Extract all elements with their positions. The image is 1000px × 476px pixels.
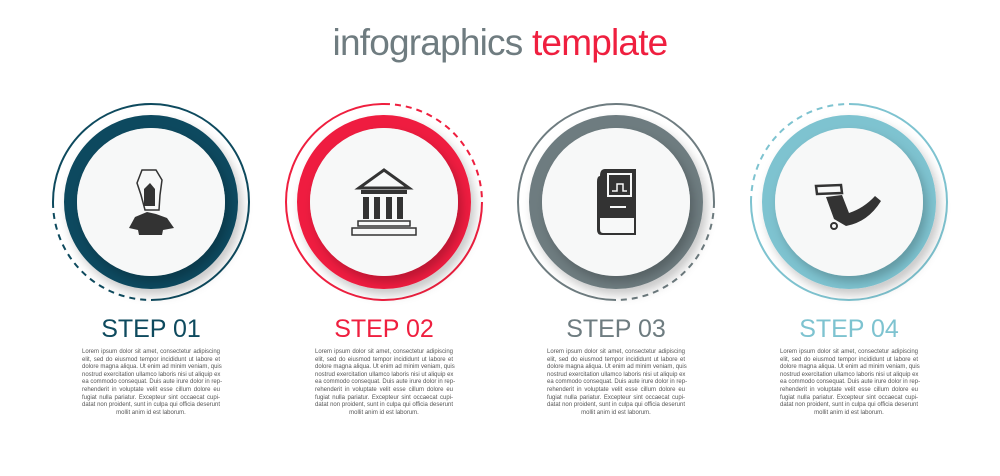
step 03 text: mollit anim id est laborum.	[581, 410, 651, 416]
step 04 text: nostrud exercitation ullamco laboris nisi ut aliquip ex	[780, 372, 918, 378]
step 02 text: STEP 02	[334, 315, 434, 343]
step 04 text: datat non proident, sunt in culpa qui officia deserunt	[780, 402, 918, 408]
step 01 text: STEP 01	[101, 315, 201, 343]
step 02 text: Lorem ipsum dolor sit amet, consectetur adipiscing	[315, 349, 453, 355]
step 02 text	[315, 315, 455, 416]
step 03 text: rehenderit in voluptate velit esse cillum dolore eu	[547, 387, 685, 393]
step 04 text: mollit anim id est laborum.	[814, 410, 884, 416]
step 02 text: nostrud exercitation ullamco laboris nisi ut aliquip ex	[315, 372, 453, 378]
step 4 circle	[751, 104, 947, 300]
step 1 circle	[53, 104, 249, 300]
step 04 text: elit, sed do eiusmod tempor incididunt ut labore et	[780, 357, 918, 363]
step 02 text: rehenderit in voluptate velit esse cillum dolore eu	[315, 387, 453, 393]
icon: book	[597, 169, 636, 235]
step 01 text: rehenderit in voluptate velit esse cillum dolore eu	[82, 387, 220, 393]
step 04 text: dolore magna aliqua. Ut enim ad minim veniam, quis	[780, 364, 920, 370]
step 03 text: Lorem ipsum dolor sit amet, consectetur adipiscing	[547, 349, 685, 355]
step 01 text: dolore magna aliqua. Ut enim ad minim veniam, quis	[82, 364, 222, 370]
step 01 text: datat non proident, sunt in culpa qui officia deserunt	[82, 402, 220, 408]
step 03 text: datat non proident, sunt in culpa qui officia deserunt	[547, 402, 685, 408]
step 04 text: rehenderit in voluptate velit esse cillum dolore eu	[780, 387, 918, 393]
step 01 text: fugiat nulla pariatur. Excepteur sint occaecat cupi-	[82, 395, 220, 401]
step 01 text	[82, 315, 222, 416]
step 02 text: elit, sed do eiusmod tempor incididunt ut labore et	[315, 357, 453, 363]
step 3 circle	[518, 104, 714, 300]
icon: horn	[816, 185, 881, 229]
step 03 text: STEP 03	[566, 315, 666, 343]
step 01 text: elit, sed do eiusmod tempor incididunt ut labore et	[82, 357, 220, 363]
step 2 circle	[286, 104, 482, 300]
step 03 text: dolore magna aliqua. Ut enim ad minim veniam, quis	[547, 364, 687, 370]
step 02 text: mollit anim id est laborum.	[349, 410, 419, 416]
step 02 text: dolore magna aliqua. Ut enim ad minim veniam, quis	[315, 364, 455, 370]
step 04 text: ea commodo consequat. Duis aute irure dolor in rep-	[780, 379, 920, 385]
step 03 text: fugiat nulla pariatur. Excepteur sint occaecat cupi-	[547, 395, 685, 401]
step 01 text: ea commodo consequat. Duis aute irure dolor in rep-	[82, 379, 222, 385]
step 03 text: ea commodo consequat. Duis aute irure dolor in rep-	[547, 379, 687, 385]
icon: museum building	[352, 170, 416, 235]
title: infographics template	[333, 22, 667, 63]
step 03 text	[547, 315, 687, 416]
step 04 text	[780, 315, 920, 416]
step 03 text: elit, sed do eiusmod tempor incididunt ut labore et	[547, 357, 685, 363]
step 04 text: STEP 04	[799, 315, 899, 343]
icon: bust	[129, 170, 174, 235]
step 01 text: nostrud exercitation ullamco laboris nisi ut aliquip ex	[82, 372, 220, 378]
step 04 text: fugiat nulla pariatur. Excepteur sint occaecat cupi-	[780, 395, 918, 401]
step 03 text: nostrud exercitation ullamco laboris nisi ut aliquip ex	[547, 372, 685, 378]
step 02 text: fugiat nulla pariatur. Excepteur sint occaecat cupi-	[315, 395, 453, 401]
step 04 text: Lorem ipsum dolor sit amet, consectetur adipiscing	[780, 349, 918, 355]
step 02 text: ea commodo consequat. Duis aute irure dolor in rep-	[315, 379, 455, 385]
step 01 text: mollit anim id est laborum.	[116, 410, 186, 416]
step 02 text: datat non proident, sunt in culpa qui officia deserunt	[315, 402, 453, 408]
step 01 text: Lorem ipsum dolor sit amet, consectetur adipiscing	[82, 349, 220, 355]
